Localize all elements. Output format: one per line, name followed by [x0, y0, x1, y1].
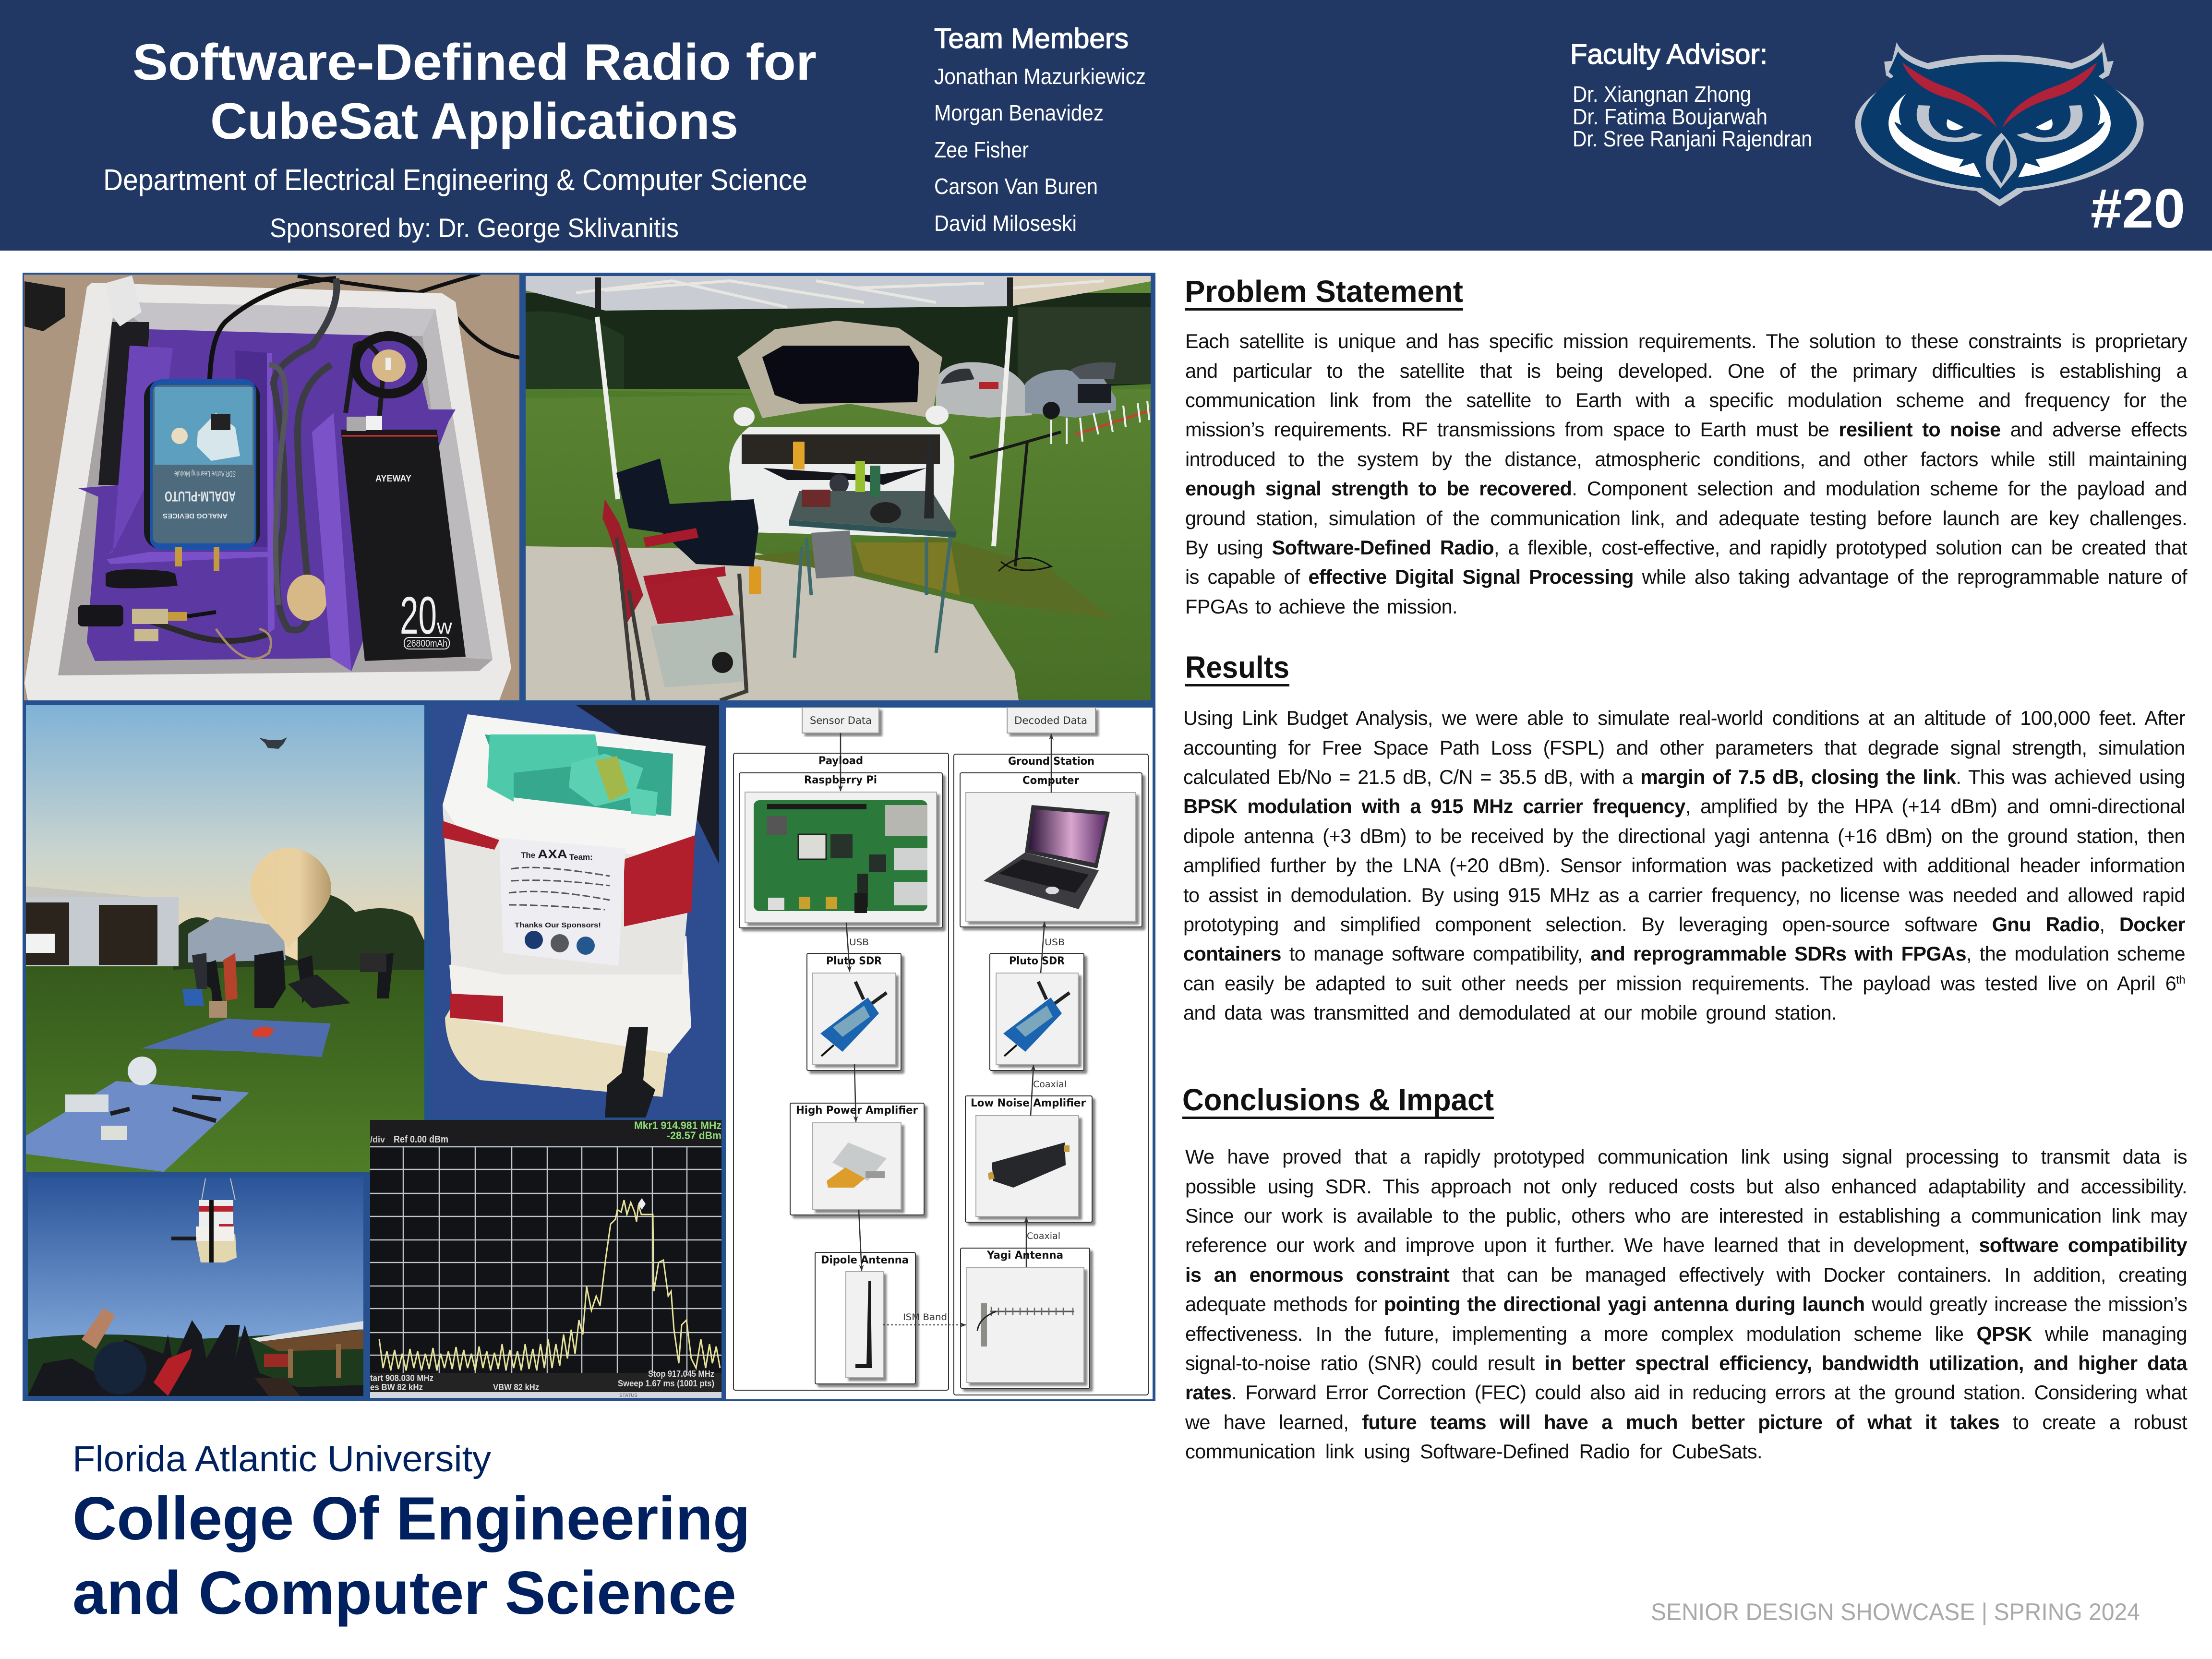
- icon: hangar building: [26, 886, 179, 966]
- heading: Problem Statement: Problem Statement: [1185, 274, 1463, 309]
- team label card: [499, 838, 625, 966]
- component image tiles: [745, 792, 1136, 1382]
- faculty advisors: Dr. Xiangnan Zhong: [1573, 82, 1751, 107]
- icon: ADALM-Pluto SDR: ANALOG DEVICES: [163, 512, 228, 520]
- component titles: Pluto SDR: [1009, 955, 1065, 967]
- faculty advisors: Faculty Advisor:: [1570, 39, 1767, 70]
- text: results: calculated Eb/No = 21.5 dB, C/N = 35.5 dB, with a margin of 7.5 dB, closing the link. This was achieved using: [1183, 766, 2185, 788]
- icon: FAU owl logo: [1855, 42, 2144, 206]
- icon: balloon: [251, 848, 331, 948]
- icon: ADALM-Pluto SDR: [144, 379, 260, 550]
- component titles: Yagi Antenna: [986, 1250, 1063, 1262]
- icon: red tape bands: [443, 821, 695, 926]
- icon: foam lid: [443, 714, 706, 859]
- text: conclusions and impact: rates. Forward Error Correction (FEC) could also aid in reducing errors at the ground station. Considering what: [1185, 1381, 2187, 1404]
- icon: power bank: [312, 413, 466, 671]
- icon: red folding chair: [602, 499, 746, 700]
- icon: yagi antenna: [977, 1303, 1074, 1346]
- photo: spectrum analyzer screen: [370, 1119, 721, 1398]
- analyzer readouts: Sweep 1.67 ms (1001 pts): [618, 1379, 714, 1388]
- faculty advisors: Dr. Fatima Boujarwah: [1573, 104, 1767, 129]
- icon: power bank: 20: [400, 586, 437, 645]
- icon: orange cup: [749, 566, 761, 594]
- icon: dipole antenna: [855, 1281, 872, 1368]
- icon: Pluto SDR right: [1003, 982, 1070, 1056]
- faculty advisors: [1570, 39, 1812, 151]
- text: problem statement: By using Software-Defined Radio, a flexible, cost-effective, and rapidly prototyped solution can be created that: [1185, 536, 2187, 559]
- title: Software-Defined Radio for: [132, 33, 817, 91]
- text: conclusions and impact: we have learned, future teams will have a much better picture of what it takes to create a robust: [1185, 1411, 2187, 1433]
- icon: blue tarps with gear: [26, 1019, 331, 1172]
- text: problem statement: ground station, simulation of the communication link, and adequate testing before launch are key challenges.: [1185, 507, 2187, 529]
- photo: payload release with raised hands: [28, 1177, 363, 1396]
- text: conclusions and impact: possible using SDR. This approach not only reduced costs but also enhanced adaptability and accessibility.: [1185, 1175, 2187, 1198]
- text: results: Using Link Budget Analysis, we were able to simulate real-world conditions at an altitude of 100,000 feet. After: [1183, 707, 2185, 729]
- text: problem statement: and particular to the satellite that is being developed. One of the primary difficulties is establishing a: [1185, 360, 2187, 382]
- text: results: accounting for Free Space Path Loss (FSPL) and other parameters that degrade signal strength, simulation: [1183, 736, 2185, 759]
- icon: power bank: w: [436, 615, 452, 638]
- icon: drone: [259, 737, 287, 749]
- icon: rubber antenna: [106, 569, 178, 589]
- text: conclusions and impact: reference our work and improve upon it further. We have learned that in development, software compatibility: [1185, 1234, 2187, 1256]
- team members: [934, 23, 1146, 236]
- icon: black antenna pouch: [605, 1027, 655, 1118]
- photo: balloon launch preparation: [26, 705, 424, 1172]
- icon: black folding chair: [616, 458, 758, 566]
- team members: Zee Fisher: [934, 137, 1029, 162]
- text: results: dipole antenna (+3 dBm) to be received by the directional yagi antenna (+16 dBm) on the ground station, then: [1183, 825, 2185, 847]
- icon: backpack: [811, 530, 854, 578]
- icon: team members on the field: [182, 950, 394, 1018]
- text: problem statement: mission’s requirements. RF transmissions from space to Earth must be resilient to noise and adverse effects: [1185, 418, 2187, 441]
- icon: power bank: 26800mAh: [407, 638, 447, 649]
- photo: payload box with team label: [443, 705, 719, 1118]
- team members: Jonathan Mazurkiewicz: [934, 64, 1146, 89]
- team label card: Team:: [569, 853, 593, 862]
- icon: silver parked car: [936, 362, 1033, 418]
- analyzer readouts: Stop 917.045 MHz: [648, 1369, 714, 1379]
- link labels: [849, 937, 1067, 1322]
- icon: low noise amplifier: [988, 1142, 1070, 1188]
- text: results: [1183, 707, 2185, 1024]
- icon: gray shed: [188, 917, 286, 962]
- link labels: USB: [1045, 937, 1065, 948]
- icon: high power amplifier: [827, 1142, 887, 1188]
- link labels: USB: [849, 937, 869, 948]
- icon: USB cable plugs: [105, 276, 142, 326]
- heading: Conclusions & Impact: Conclusions & Impact: [1182, 1082, 1494, 1117]
- spectrum trace: [379, 1200, 720, 1370]
- connection arrows: [841, 733, 1051, 1325]
- text: conclusions and impact: is an enormous constraint that can be managed effectively with Docker containers. In addition, creating: [1185, 1263, 2187, 1286]
- text: problem statement: is capable of effective Digital Signal Processing while also taking advantage of the reprogrammable nature of: [1185, 565, 2187, 588]
- text: results: to assist in demodulation. By using 915 MHz as a carrier frequency, no license was needed and allowed rapid: [1183, 884, 2185, 906]
- title: [132, 33, 817, 150]
- analyzer readouts: es BW 82 kHz: [370, 1382, 423, 1392]
- text: results: and data was transmitted and demodulated at our mobile ground station.: [1183, 1001, 1837, 1024]
- footer: college name: Florida Atlantic University: [72, 1439, 491, 1479]
- text: conclusions and impact: We have proved that a rapidly prototyped communication link using signal processing to transmit data is: [1185, 1145, 2187, 1168]
- text: problem statement: [1185, 330, 2188, 618]
- analyzer readouts: [370, 1119, 721, 1398]
- icon: Pluto SDR left: [820, 982, 887, 1056]
- text: conclusions and impact: [1185, 1145, 2188, 1463]
- analyzer readouts: STATUS: [619, 1393, 637, 1398]
- photo: payload electronics in foam box: [24, 275, 519, 700]
- icon: payload box in flight: [171, 1178, 237, 1262]
- component titles: High Power Amplifier: [796, 1105, 918, 1117]
- text: results: containers to manage software compatibility, and reprogrammable SDRs with FPGAs, the modulation scheme: [1183, 942, 2185, 965]
- sensor data box: Sensor Data: [810, 715, 872, 726]
- photo: ground station in the field: [526, 276, 1151, 700]
- component titles: Pluto SDR: [826, 955, 882, 967]
- icon: raised hands and heads: [28, 1308, 363, 1396]
- component titles: Payload: [818, 755, 863, 767]
- text: problem statement: introduced to the system by the distance, atmospheric conditions, and other factors while still maintaining: [1185, 448, 2187, 470]
- icon: lower foam box: [449, 936, 691, 1054]
- component frames: [739, 773, 1142, 1388]
- component titles: [796, 755, 1094, 1266]
- team label card: AXA: [538, 847, 567, 861]
- text: results: prototyping and simplified component selection. By leveraging open-source software Gnu Radio, Docker: [1183, 913, 2185, 936]
- decoded data box: Decoded Data: [1014, 715, 1087, 726]
- footer: college name: and Computer Science: [72, 1559, 736, 1627]
- icon: marker: [638, 1198, 646, 1210]
- analyzer readouts: Ref 0.00 dBm: [394, 1134, 448, 1145]
- sensor data box: [802, 708, 879, 733]
- spectrum grid: [370, 1147, 721, 1373]
- text: problem statement: enough signal strength to be recovered. Component selection and modulation scheme for the payload and: [1185, 477, 2187, 500]
- icon: Raspberry Pi board: [754, 800, 927, 913]
- text: conclusions and impact: communication link using Software-Defined Radio for CubeSats.: [1185, 1440, 1762, 1463]
- header band: [0, 0, 2212, 251]
- icon: yagi antenna on mic stand: [970, 401, 1151, 571]
- team label card: The: [521, 851, 535, 860]
- link labels: Coaxial: [1027, 1231, 1060, 1241]
- analyzer readouts: -28.57 dBm: [667, 1130, 721, 1142]
- text: problem statement: Each satellite is unique and has specific mission requirements. The solution to these constraints is proprietary: [1185, 330, 2187, 352]
- icon: canopy poles: [597, 317, 1010, 546]
- footer: showcase note: SENIOR DESIGN SHOWCASE | SPRING 2024: [1651, 1599, 2140, 1625]
- text: results: can easily be adapted to suit other needs per mission requirements. The payload was tested live on April 6th: [1183, 972, 2185, 995]
- icon: power bank: AYEWAY: [375, 474, 411, 484]
- text: problem statement: communication link from the satellite to Earth with a specific modulation scheme and frequency for the: [1185, 389, 2187, 411]
- text: problem statement: FPGAs to achieve the mission.: [1185, 595, 1457, 618]
- team members: Team Members: [934, 23, 1129, 54]
- team members: Morgan Benavidez: [934, 100, 1104, 125]
- icon: table with gear: [789, 434, 957, 658]
- decoded data box: [1007, 708, 1095, 733]
- icon: canopy: [526, 276, 1151, 311]
- analyzer readouts: /div: [370, 1135, 385, 1144]
- heading: Results: Results: [1185, 650, 1289, 685]
- component titles: Low Noise Amplifier: [971, 1097, 1086, 1109]
- team members: David Miloseski: [934, 211, 1077, 236]
- footer: college name: College Of Engineering: [72, 1484, 750, 1552]
- icon: power amplifiers: [78, 605, 216, 641]
- title: CubeSat Applications: [210, 92, 738, 150]
- team label card: Thanks Our Sponsors!: [515, 921, 601, 929]
- text: results: BPSK modulation with a 915 MHz carrier frequency, amplified by the HPA (+14 dBm) and omni-directional: [1183, 795, 2185, 817]
- icon: cables: [144, 278, 384, 659]
- text: conclusions and impact: adequate methods for pointing the directional yagi antenna during launch would greatly increase the mission’s: [1185, 1293, 2187, 1315]
- component titles: Raspberry Pi: [804, 774, 877, 786]
- icon: ADALM-Pluto SDR: ADALM-PLUTO: [165, 488, 236, 504]
- icon: laptop: [984, 805, 1110, 909]
- panel: photo collage and block diagram: [23, 273, 1155, 1401]
- footer: college name: [72, 1439, 750, 1627]
- icon: cream base: [445, 1003, 670, 1097]
- text: conclusions and impact: effectiveness. In the future, implementing a more complex modulation scheme like QPSK while managing: [1185, 1322, 2187, 1345]
- component titles: Ground Station: [1008, 756, 1094, 768]
- text: results: amplified further by the LNA (+20 dBm). Sensor information was packetized with additional header information: [1183, 854, 2185, 877]
- icon: trees: [173, 892, 424, 970]
- payload group: [733, 753, 1148, 1395]
- text: conclusions and impact: signal-to-noise ratio (SNR) could result in better spectral efficiency, bandwidth utilization, and higher data: [1185, 1352, 2187, 1374]
- block diagram: [726, 708, 1153, 1399]
- text: conclusions and impact: Since our work is available to the public, others who are interested in establishing a communication link may: [1185, 1204, 2187, 1227]
- link labels: Coaxial: [1033, 1079, 1067, 1090]
- component titles: Dipole Antenna: [821, 1254, 909, 1266]
- faculty advisors: Dr. Sree Ranjani Rajendran: [1573, 126, 1812, 151]
- sponsor line: Sponsored by: Dr. George Sklivanitis: [270, 213, 679, 243]
- icon: ADALM-Pluto SDR: SDR Active Learning Module: [174, 469, 236, 478]
- department line: Department of Electrical Engineering & Computer Science: [103, 164, 807, 197]
- analyzer readouts: tart 908.030 MHz: [370, 1373, 433, 1383]
- icon: car with raised hood: [729, 321, 954, 538]
- analyzer readouts: VBW 82 kHz: [493, 1382, 539, 1392]
- project number: #20: [2091, 177, 2185, 240]
- team members: Carson Van Buren: [934, 174, 1098, 199]
- icon: upper foam box: [443, 805, 694, 974]
- icon: coil with wood standoff: [355, 336, 422, 394]
- icon: gray parked car with open trunk: [1025, 362, 1116, 419]
- link labels: ISM Band: [903, 1312, 947, 1322]
- component titles: Computer: [1022, 775, 1079, 787]
- icon: pavilion: [252, 1321, 363, 1378]
